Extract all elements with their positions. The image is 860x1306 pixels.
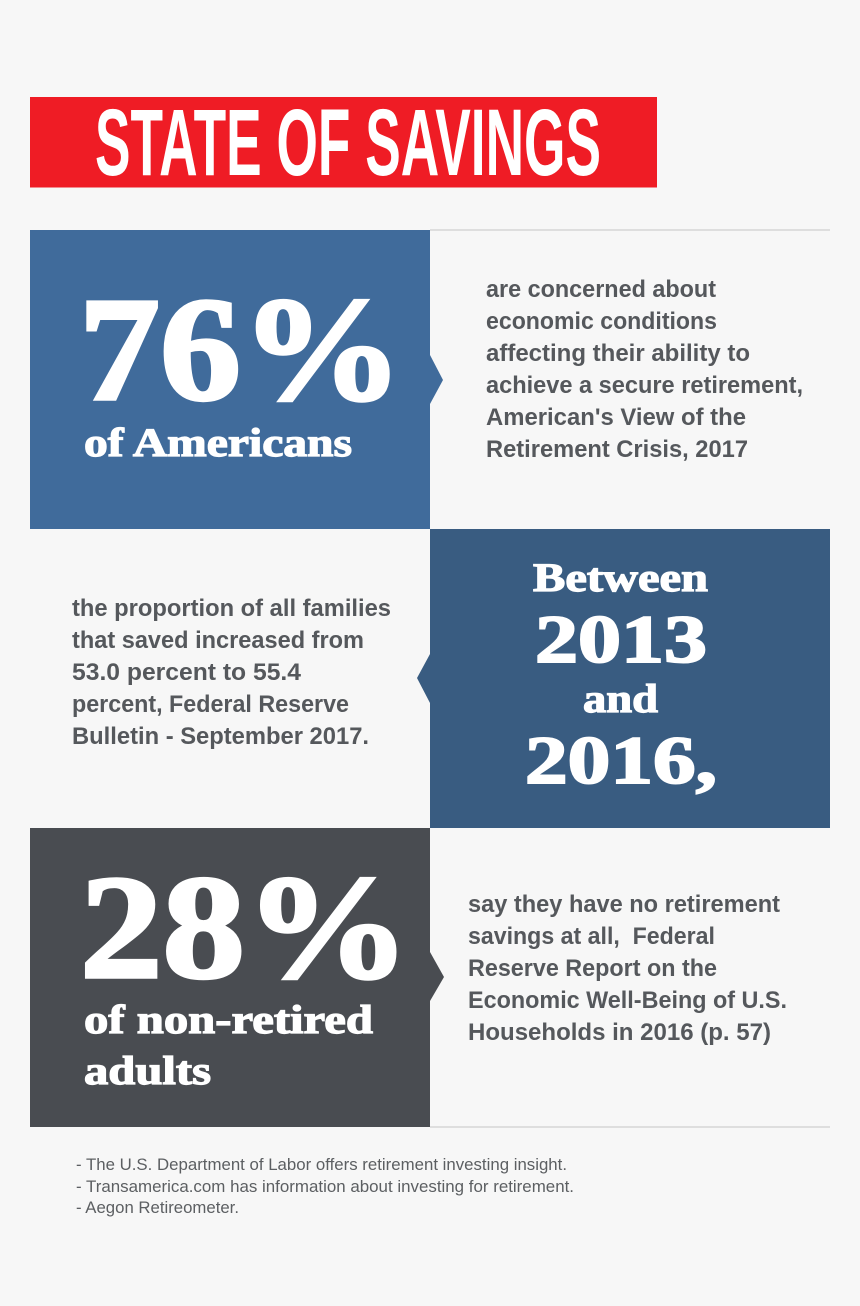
footer notes: - Aegon Retireometer.	[76, 1199, 239, 1217]
stat: 2013: 2013	[535, 601, 707, 677]
text block: proportion of families that saved: percent, Federal Reserve	[72, 691, 349, 718]
text block: no retirement savings: say they have no retirement	[468, 891, 780, 918]
label: Between: Between	[533, 555, 708, 600]
text block: concerned about economic conditions: are concerned about	[486, 276, 716, 303]
text block: concerned about economic conditions: achieve a secure retirement,	[486, 372, 803, 399]
panel: Between 2013 and 2016	[417, 529, 830, 828]
text block: no retirement savings	[468, 891, 787, 1046]
label: and: and	[583, 676, 658, 721]
stat: 76%: 76%	[79, 268, 403, 432]
text block: proportion of families that saved: Bulletin - September 2017.	[72, 723, 369, 750]
text block: concerned about economic conditions: economic conditions	[486, 308, 717, 335]
panel: 28% of non-retired adults	[30, 828, 444, 1127]
panel: 76% of Americans	[30, 230, 443, 529]
text block: concerned about economic conditions: American's View of the	[486, 404, 746, 431]
text block: proportion of families that saved: 53.0 percent to 55.4	[72, 659, 302, 686]
text block: concerned about economic conditions: affecting their ability to	[486, 340, 750, 367]
text block: no retirement savings: Households in 2016 (p. 57)	[468, 1019, 771, 1046]
footer notes: - The U.S. Department of Labor offers retirement investing insight.	[76, 1156, 567, 1174]
text block: no retirement savings: Economic Well-Being of U.S.	[468, 987, 787, 1014]
stat: 2016: 2016,	[525, 722, 717, 798]
text block: no retirement savings: Reserve Report on the	[468, 955, 717, 982]
text block: concerned about economic conditions	[486, 276, 803, 463]
label: adults: adults	[84, 1048, 211, 1093]
stat: 28%: 28%	[80, 846, 410, 1010]
title banner	[30, 90, 657, 196]
label: of Americans: of Americans	[84, 420, 352, 465]
text block: no retirement savings: savings at all, Federal	[468, 923, 715, 950]
footer notes	[76, 1156, 574, 1217]
text block: proportion of families that saved: the proportion of all families	[72, 595, 391, 622]
text block: proportion of families that saved: that saved increased from	[72, 627, 364, 654]
text block: concerned about economic conditions: Retirement Crisis, 2017	[486, 436, 748, 463]
label: of non-retired: of non-retired	[84, 997, 373, 1042]
footer notes: - Transamerica.com has information about investing for retirement.	[76, 1178, 574, 1196]
text block: proportion of families that saved	[72, 595, 391, 750]
